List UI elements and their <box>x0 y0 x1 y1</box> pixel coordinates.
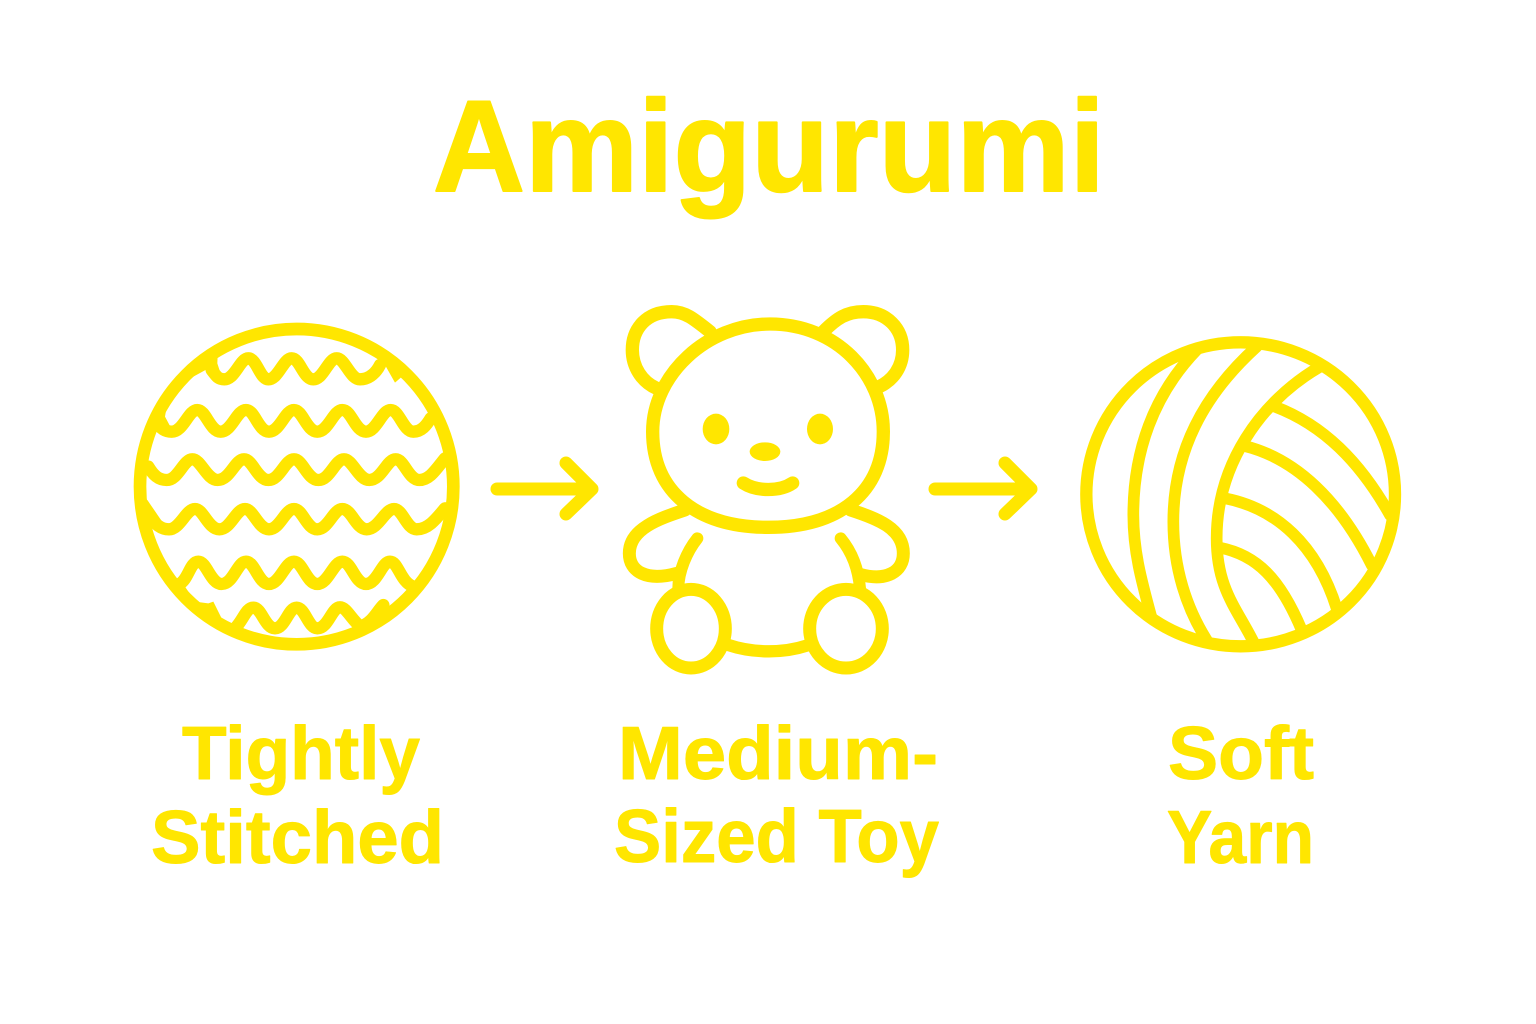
icon: tightly stitched ball <box>140 329 453 644</box>
label: medium-sized toy: Medium- <box>618 711 938 795</box>
arrow: stitched to toy <box>497 463 592 514</box>
label: soft yarn <box>1167 711 1314 879</box>
label: medium-sized toy: Sized Toy <box>614 794 939 878</box>
bear nose <box>750 442 780 461</box>
bear mouth <box>743 483 793 489</box>
label: soft yarn: Soft <box>1168 711 1314 795</box>
label: soft yarn: Yarn <box>1167 795 1314 879</box>
icon: yarn ball <box>1086 342 1395 646</box>
bear body sides <box>678 538 860 588</box>
title: Amigurumi <box>433 73 1105 219</box>
label: tightly stitched: Stitched <box>151 795 444 879</box>
label: tightly stitched <box>151 711 444 879</box>
bear legs <box>657 589 882 668</box>
label: medium-sized toy <box>614 711 939 878</box>
bear eyes <box>703 414 833 444</box>
icon: teddy bear toy <box>629 312 903 668</box>
label: tightly stitched: Tightly <box>182 711 420 795</box>
arrow: toy to yarn <box>935 463 1031 514</box>
bear head <box>653 324 883 527</box>
bear bottom <box>728 645 807 651</box>
bear left ear <box>632 312 710 388</box>
bear right ear <box>823 312 903 387</box>
bear arms <box>629 510 903 577</box>
